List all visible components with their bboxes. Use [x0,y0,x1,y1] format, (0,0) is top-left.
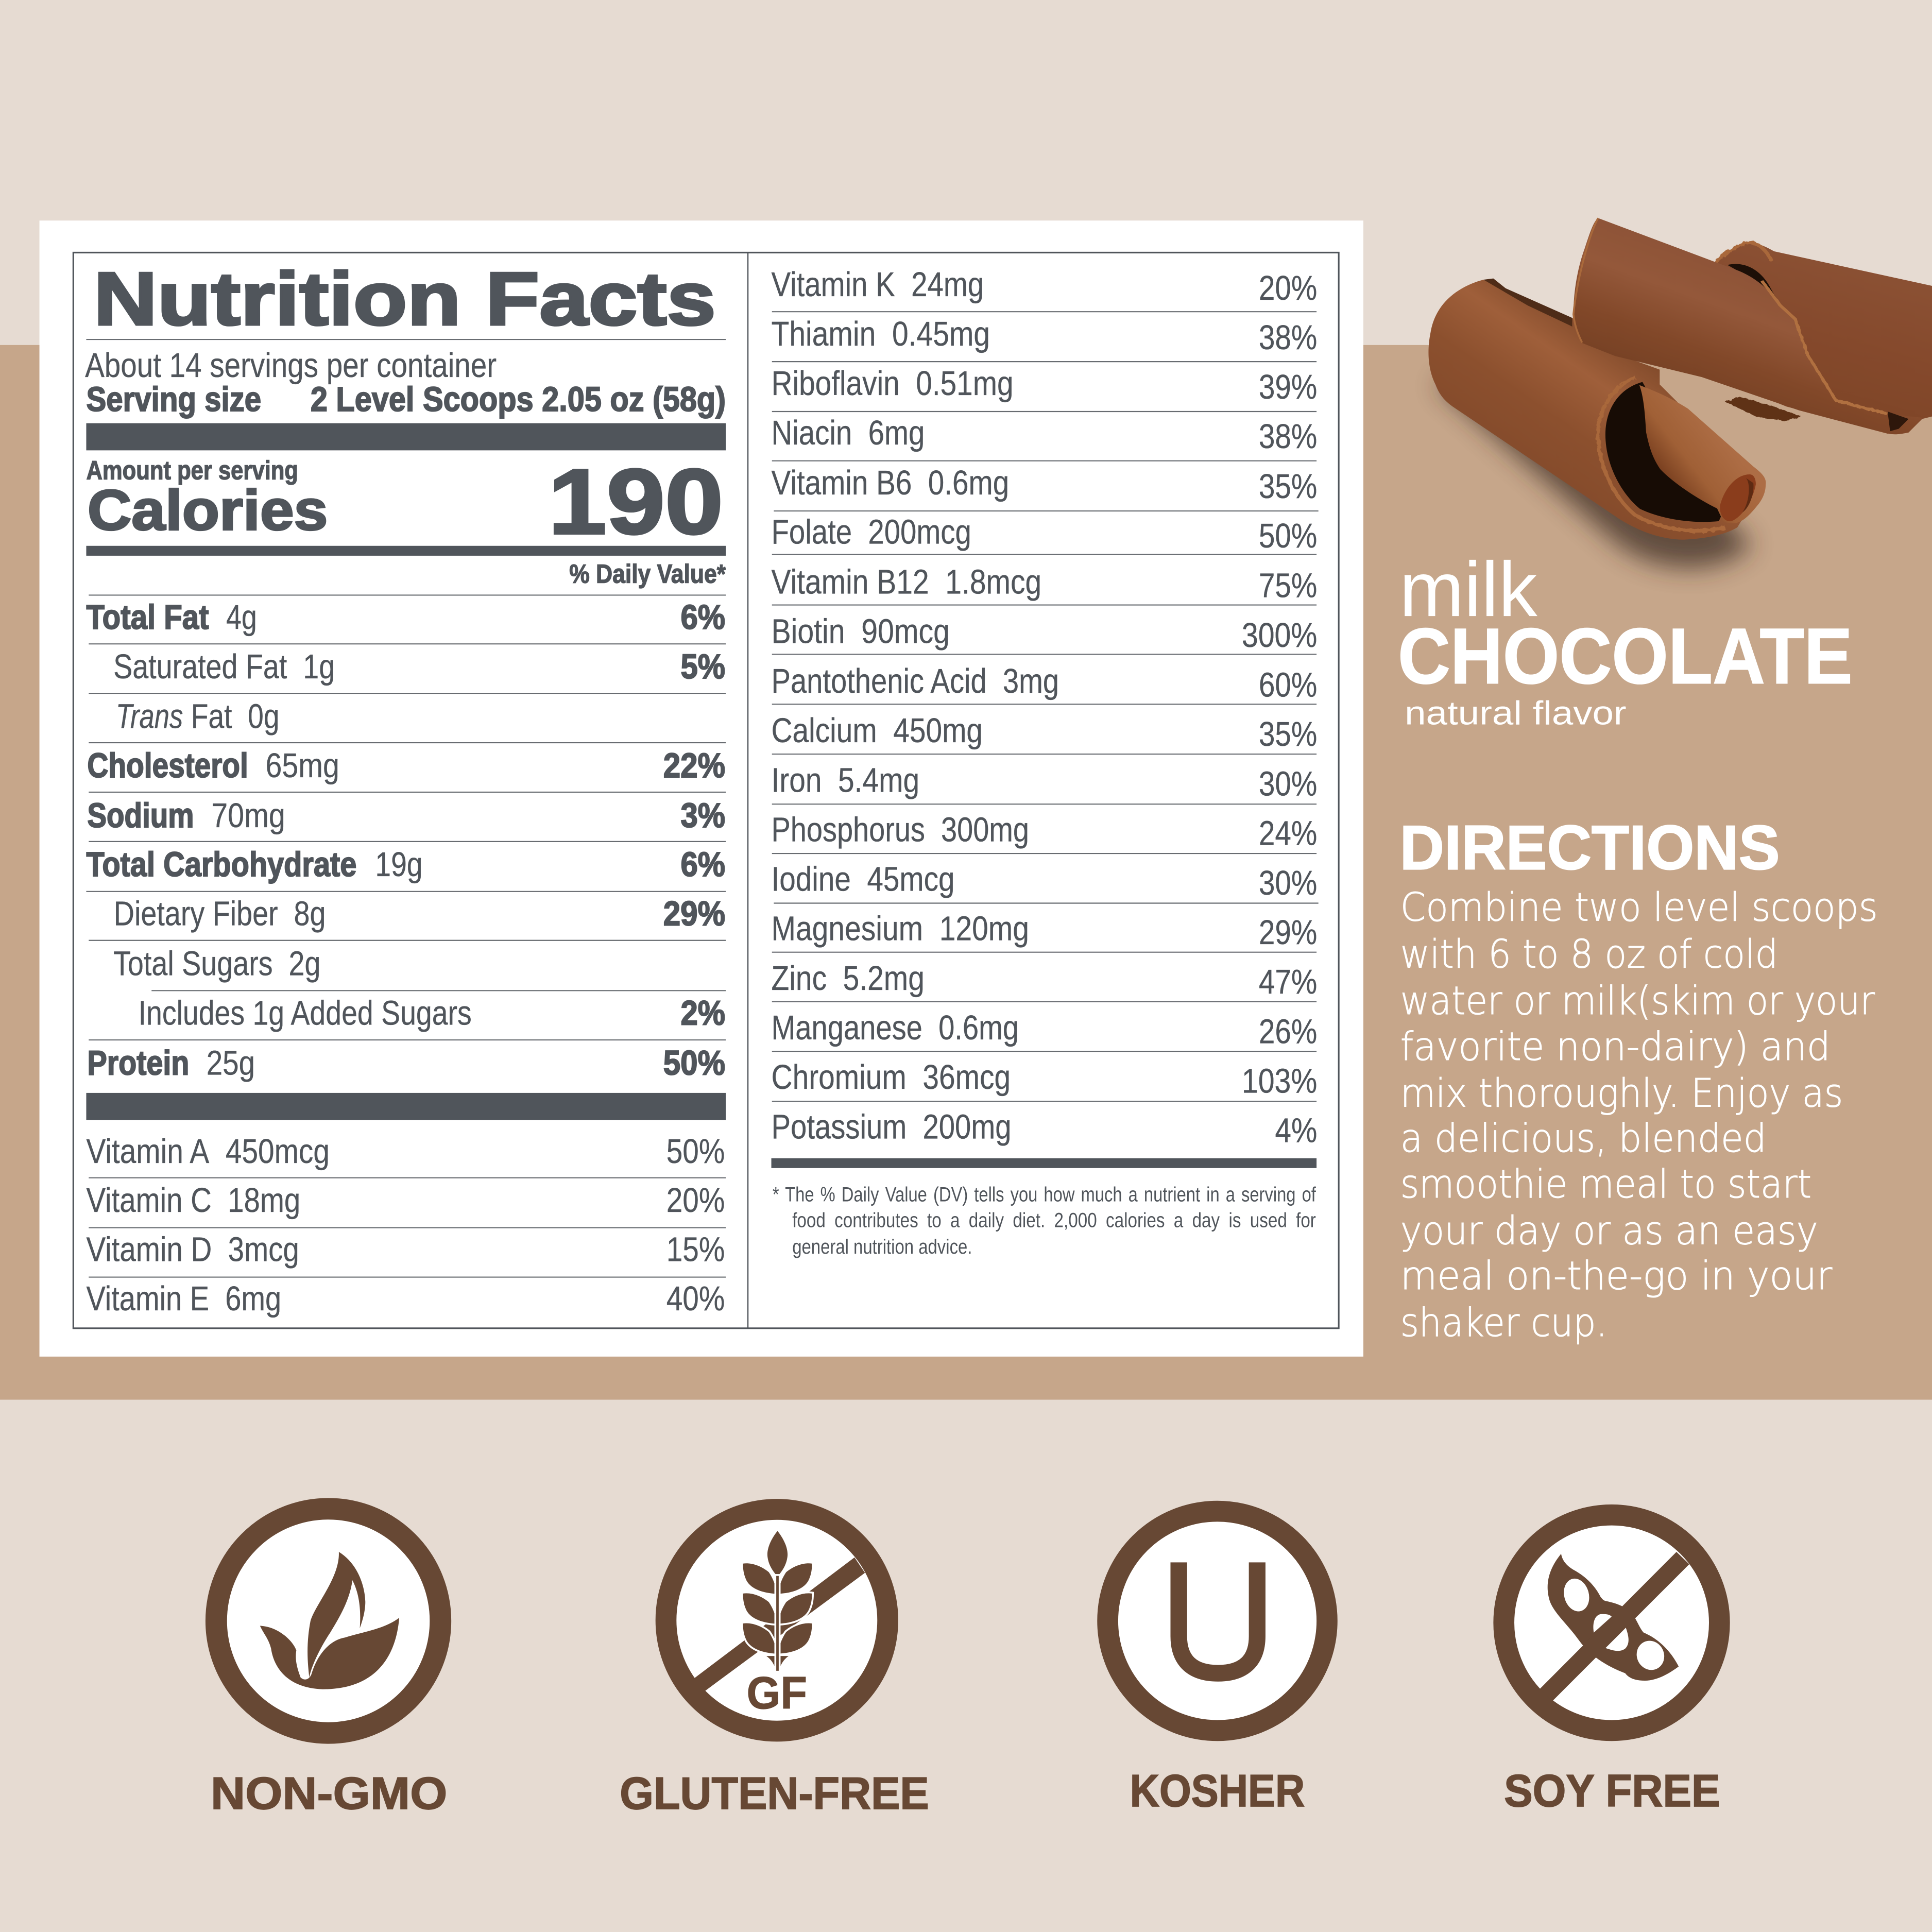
table frame [73,252,1339,1328]
row: Magnesium: Magnesium 120mg [772,910,1029,948]
row: Riboflavin [772,365,1317,406]
row: Niacin: Niacin 6mg [772,414,925,452]
row: Vitamin B12: 75% [1259,567,1317,605]
footnote: food contributes to a daily diet. 2,000 calories a day is used for [792,1209,1316,1232]
row: Potassium: 4% [1275,1112,1317,1150]
icon: gluten-free wheat: GF [747,1667,807,1718]
row: Trans Fat: Trans [116,697,183,736]
row: Potassium [772,1108,1317,1150]
row: Vitamin B12 [772,563,1317,605]
label: non-GMO: NON-GMO [211,1768,447,1819]
row: Dietary Fiber: 29% [663,895,725,933]
row: Vitamin A [86,1133,725,1171]
row: Total Carbohydrate: 6% [680,846,725,884]
row: Vitamin B6: Vitamin B6 0.6mg [772,464,1009,502]
row: Chromium [772,1058,1317,1100]
calories value: 190 [549,451,723,554]
heading: directions: DIRECTIONS [1400,813,1780,883]
serving size: 2 Level Scoops 2.05 oz (58g) [311,381,726,419]
row: Folate [772,514,1317,555]
row: Phosphorus: 24% [1259,815,1317,853]
row: Trans Fat: Fat 0g [191,697,280,736]
row: Niacin [772,414,1317,456]
row: Vitamin A: 50% [666,1133,725,1171]
row: Added Sugars: 2% [680,995,725,1033]
row: Total Sugars: Total Sugars 2g [113,945,320,983]
row: Cholesterol: Cholesterol [87,747,248,785]
directions body text: water or milk(skim or your [1400,978,1875,1023]
row: Total Carbohydrate: 19g [375,846,423,884]
row: Thiamin: Thiamin 0.45mg [772,315,990,353]
thick divider lower [86,1093,726,1120]
directions body text: shaker cup. [1400,1300,1608,1345]
row: Trans Fat [116,697,280,736]
amount per serving: Amount per serving [86,455,298,485]
row: Added Sugars: Includes 1g Added Sugars [139,995,472,1033]
row: Total Carbohydrate [86,846,725,884]
row: Vitamin D: 15% [666,1231,725,1269]
row: Vitamin K: 20% [1259,269,1317,307]
row: Vitamin D [86,1231,725,1269]
row: Niacin: 38% [1259,418,1317,456]
row: Biotin: Biotin 90mcg [772,613,950,651]
icon: non-GMO leaf [216,1509,440,1733]
directions body text: Combine two level scoops [1400,885,1878,930]
row: Vitamin C: 20% [666,1182,725,1220]
row: Manganese: Manganese 0.6mg [772,1009,1019,1047]
row: Chromium: 103% [1242,1062,1317,1100]
row: Vitamin C [86,1182,725,1220]
row: Cholesterol [87,747,725,785]
tan background band [0,345,1932,1400]
row: Iodine: 30% [1259,864,1317,902]
row: Biotin: 300% [1242,617,1317,655]
row: Iron: Iron 5.4mg [772,761,919,799]
row: Total Fat [86,599,725,637]
row: Vitamin C: Vitamin C 18mg [86,1182,300,1220]
row: Iodine [772,861,1317,902]
row: Sodium: 3% [680,797,725,835]
row: Iron [772,761,1317,803]
heading: Nutrition Facts: Nutrition Facts [94,257,716,340]
row: Added Sugars [139,995,725,1033]
row: Magnesium [772,910,1317,952]
row: Phosphorus [772,811,1317,853]
footnote: general nutrition advice. [792,1236,972,1258]
wheat stalk [743,1531,812,1671]
flavor title: natural flavor [1405,695,1627,732]
row: Protein: 50% [663,1044,725,1082]
row: Saturated Fat: 5% [680,648,725,686]
directions body text: with 6 to 8 oz of cold [1400,931,1778,977]
row: Zinc: Zinc 5.2mg [772,960,925,998]
row: Calcium [772,712,1317,754]
row: Calcium: 35% [1259,715,1317,754]
daily value heading: % Daily Value* [569,559,726,589]
row: Iron: 30% [1259,765,1317,803]
row: Protein: 25g [207,1044,255,1082]
row: Protein: Protein [87,1044,189,1082]
row: Vitamin B6 [772,464,1317,506]
row: Pantothenic Acid [772,662,1317,704]
row: Total Carbohydrate: Total Carbohydrate [86,846,356,884]
directions body text: smoothie meal to start [1400,1161,1811,1207]
row: Riboflavin: 39% [1259,368,1317,406]
label: gluten-free: GLUTEN-FREE [620,1768,929,1819]
panel: nutrition facts card [40,220,1363,1357]
row: Vitamin A: Vitamin A 450mcg [86,1133,330,1171]
row: Biotin [772,613,1317,655]
row: Zinc [772,960,1317,1001]
flavor title [1398,546,1853,732]
calories label: Calories [88,479,328,542]
directions body text: favorite non-dairy) and [1400,1024,1831,1069]
row: Saturated Fat: Saturated Fat 1g [113,648,335,686]
icon: soy free [1504,1515,1719,1731]
row: Vitamin K: Vitamin K 24mg [772,266,984,304]
label: kosher: KOSHER [1130,1765,1305,1816]
row: Riboflavin: Riboflavin 0.51mg [772,365,1014,403]
serving size [86,381,726,419]
row: Sodium: Sodium [87,797,194,835]
row: Vitamin B6: 35% [1259,468,1317,506]
row: Zinc: 47% [1259,963,1317,1001]
thick divider [86,423,726,450]
directions body text [1400,885,1878,1345]
row: Chromium: Chromium 36mcg [772,1058,1011,1097]
row: Potassium: Potassium 200mg [772,1108,1012,1146]
row: Vitamin B12: Vitamin B12 1.8mcg [772,563,1041,601]
row: Cholesterol: 65mg [266,747,339,785]
row: Manganese [772,1009,1317,1051]
row: Pantothenic Acid: Pantothenic Acid 3mg [772,662,1059,700]
row: Vitamin E: Vitamin E 6mg [86,1280,281,1318]
directions body text: a delicious, blended [1400,1116,1767,1161]
row: Iodine: Iodine 45mcg [772,861,954,899]
row: Manganese: 26% [1259,1013,1317,1051]
row: Total Fat: Total Fat [86,599,209,637]
row: Vitamin D: Vitamin D 3mcg [86,1231,299,1269]
row: Magnesium: 29% [1259,914,1317,952]
row: Protein [87,1044,725,1082]
row: Dietary Fiber [114,895,725,933]
row: Vitamin E [86,1280,725,1318]
directions body text: mix thoroughly. Enjoy as [1400,1070,1843,1116]
icon: gluten-free wheat [666,1509,888,1731]
footnote: * The % Daily Value (DV) tells you how much a nutrient in a serving of [773,1183,1317,1206]
flavor title: milk [1399,546,1537,632]
right column thick divider [772,1158,1317,1168]
serving size: Serving size [86,381,261,419]
row: Vitamin K [772,266,1317,307]
footnote [773,1183,1317,1258]
flavor title: CHOCOLATE [1398,612,1853,700]
row: Saturated Fat [113,648,725,686]
row: Vitamin E: 40% [666,1280,725,1318]
row: Sodium: 70mg [211,797,285,835]
row: Total Fat: 4g [226,599,257,637]
row: Cholesterol: 22% [663,747,725,785]
icon: kosher U [1108,1511,1327,1731]
row: Phosphorus: Phosphorus 300mg [772,811,1029,849]
row: Sodium [87,797,725,835]
medium divider [86,546,726,556]
row: Folate: 50% [1259,517,1317,555]
illustration: chocolate curls [1428,218,1932,568]
row: Calcium: Calcium 450mg [772,712,983,750]
row: Thiamin: 38% [1259,319,1317,357]
servings per container: About 14 servings per container [85,347,497,385]
row: Thiamin [772,315,1317,357]
row: Total Fat: 6% [680,599,725,637]
row: Pantothenic Acid: 60% [1259,666,1317,704]
row: Folate: Folate 200mcg [772,514,971,552]
row: Dietary Fiber: Dietary Fiber 8g [114,895,326,933]
label: soy free: SOY FREE [1504,1765,1720,1816]
directions body text: your day or as an easy [1400,1208,1818,1253]
directions body text: meal on-the-go in your [1400,1253,1832,1298]
